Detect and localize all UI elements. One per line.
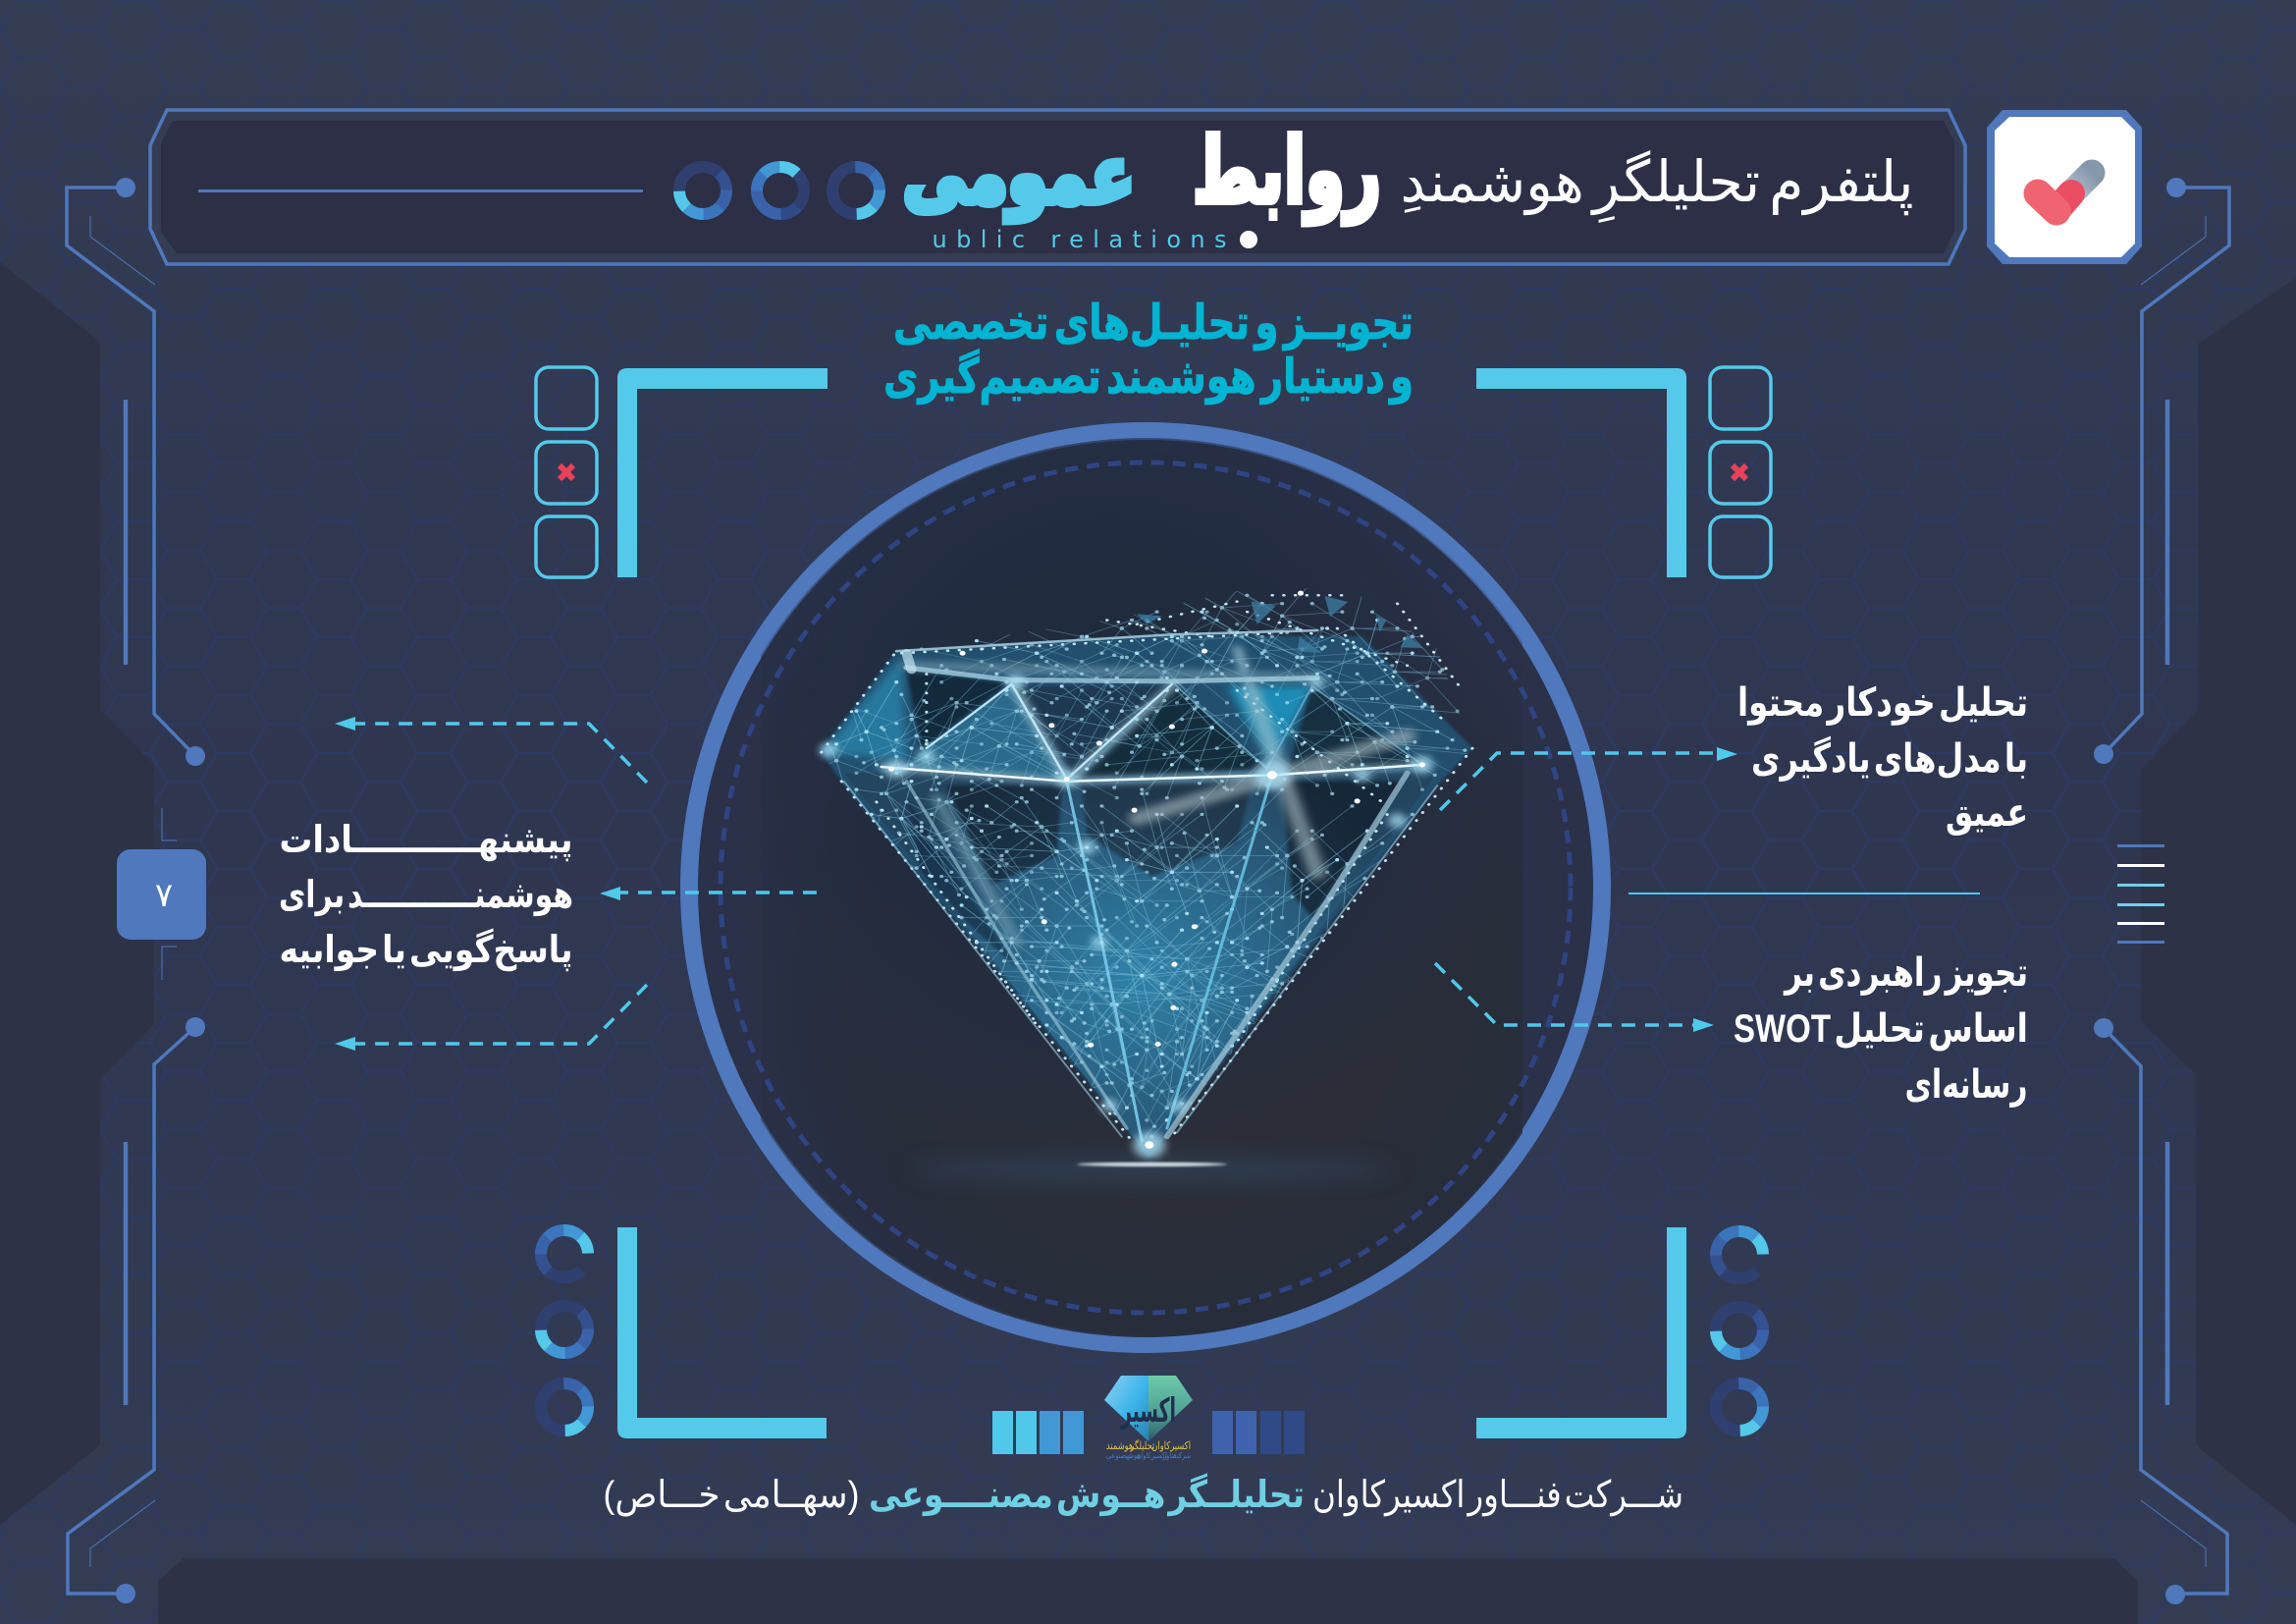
subtitle xyxy=(883,297,1414,406)
footer company name xyxy=(603,1473,1683,1517)
icon: check heart xyxy=(1987,110,2142,264)
side rings: right xyxy=(1706,1221,1773,1440)
header rings xyxy=(669,157,889,224)
diamond illustration xyxy=(815,588,1474,1187)
text block: automatic content analysis: عمیق xyxy=(1946,791,2028,836)
subtitle: و دستیار هوشمند تصمیم‌گیری xyxy=(883,349,1414,406)
text block: smart suggestions: هوشمنـــــــــــد برای xyxy=(279,875,573,916)
icon: stacked lines xyxy=(2117,844,2164,944)
company logo xyxy=(1104,1376,1193,1460)
text block: strategic recommendation xyxy=(1734,951,2028,1108)
logo: public relations: روابط xyxy=(1193,122,1381,225)
divider line xyxy=(1629,893,1980,894)
circuit lines: left xyxy=(67,178,205,1603)
light flares xyxy=(820,591,1433,1159)
crystal mesh xyxy=(827,588,1468,1146)
company logo: شرکت فناور اکسیرکاوان هوش مصنوعی xyxy=(1106,1451,1191,1460)
company logo: اکسیرکاوان تحلیلگر هوشمند xyxy=(1106,1439,1191,1452)
diamond body xyxy=(822,634,1472,1158)
corner brackets xyxy=(617,368,1686,1438)
facet edges xyxy=(844,630,1437,1141)
logo side bars: left xyxy=(992,1411,1084,1454)
side rings: left xyxy=(531,1220,598,1440)
central circle xyxy=(689,431,1602,1345)
header line xyxy=(198,189,643,192)
logo: public relations: عمومی xyxy=(903,132,1135,222)
glow edges xyxy=(881,649,1422,943)
logo: public relations xyxy=(903,122,1381,253)
text block: strategic recommendation: تجویز راهبردی بر xyxy=(1783,951,2028,996)
text block: smart suggestions: پیشنهـــــــــــادات xyxy=(279,820,573,861)
header panel xyxy=(150,110,1965,264)
footer company name: تحلیلــگر هــوش مصنــــوعی xyxy=(869,1473,1305,1516)
footer company name: (سهــامی خـــاص) xyxy=(603,1475,860,1517)
page number badge xyxy=(117,849,206,940)
subtitle: تجویــز و تحلیـل‌های تخصصی xyxy=(893,297,1414,352)
text block: automatic content analysis: تحلیل خودکار محتوا xyxy=(1737,681,2028,726)
circuit lines: right xyxy=(2094,178,2229,1604)
checkbox column: left xyxy=(536,367,597,577)
outline dots xyxy=(822,595,1472,1141)
text block: smart suggestions xyxy=(279,820,573,971)
page number badge: ۷ xyxy=(155,877,173,914)
checkbox column: right xyxy=(1710,367,1771,577)
text block: strategic recommendation: رسانه‌ای xyxy=(1904,1063,2028,1108)
text block: automatic content analysis: با مدل‌های یادگیری xyxy=(1751,735,2028,782)
logo side bars: right xyxy=(1212,1411,1305,1454)
callout arrows: right xyxy=(1435,747,1737,1032)
text block: automatic content analysis xyxy=(1737,681,2028,836)
text block: smart suggestions: پاسخ‌گویی یا جوابیه xyxy=(279,928,573,971)
text block: strategic recommendation: اساس تحلیل SWOT xyxy=(1734,1007,2028,1052)
company logo: اکسیر xyxy=(1120,1392,1176,1431)
callout arrows: left xyxy=(335,717,817,1051)
footer company name: شـــرکت فنـــاور اکسیرکاوان xyxy=(1312,1475,1683,1517)
header title: پلتفرم تحلیلگرِ هوشمندِ xyxy=(1400,150,1914,223)
logo: public relations: ublic relations xyxy=(933,226,1233,253)
floating shards xyxy=(1137,596,1423,653)
floor glow xyxy=(912,1156,1392,1184)
